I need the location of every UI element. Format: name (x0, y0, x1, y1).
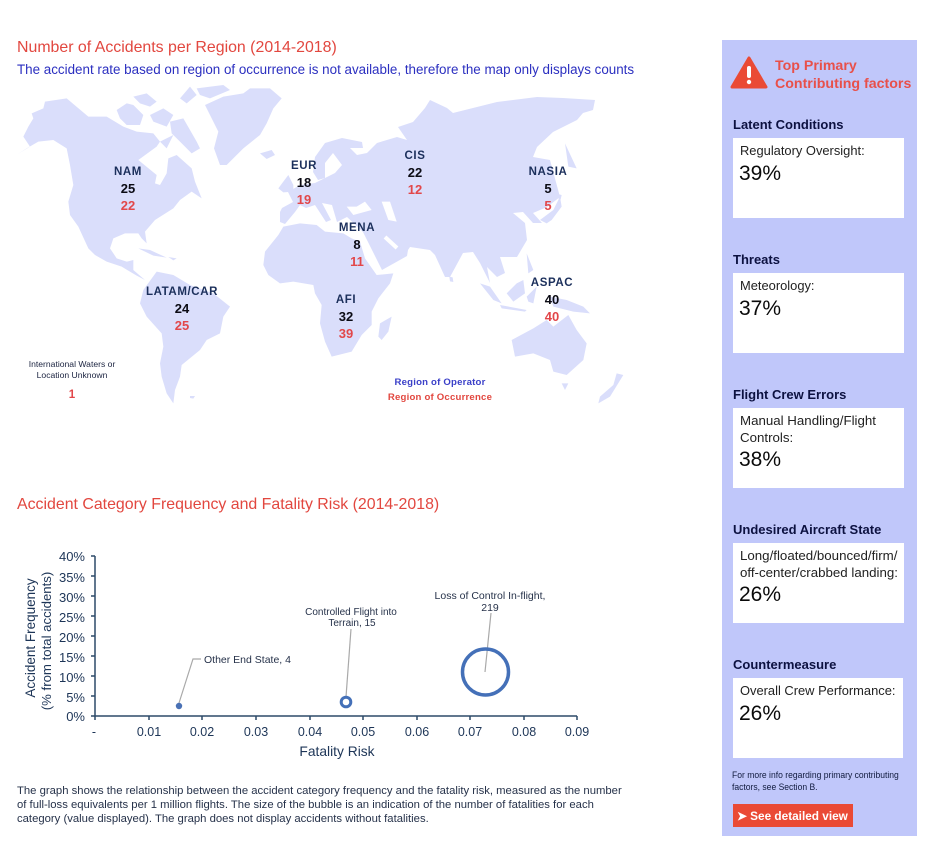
bubble label: loss of control: Loss of Control In-flight, (435, 590, 545, 602)
region: NAM: 25 (121, 181, 135, 196)
card: regulatory oversight (733, 138, 904, 218)
region: EUR (291, 160, 317, 206)
region: ASPAC: 40 (545, 308, 559, 324)
bubble chart (23, 549, 589, 759)
bubble chart: - (92, 725, 96, 739)
bubble chart: 15% (59, 650, 85, 665)
region: ASPAC: ASPAC (531, 277, 573, 289)
bubble chart: 0.08 (512, 725, 536, 739)
card: meteorology: Meteorology: (740, 278, 815, 293)
bubble chart: 0.02 (190, 725, 214, 739)
region: CIS: CIS (404, 150, 425, 162)
chart explanation: The graph shows the relationship between the accident category frequency and the fatality risk, measured as the number (17, 785, 622, 797)
heading: countermeasure: Countermeasure (733, 657, 836, 672)
region: MENA: MENA (339, 222, 375, 234)
button: see detailed view: ➤ See detailed view (737, 809, 848, 823)
button: see detailed view (733, 804, 853, 827)
world map (22, 85, 624, 404)
region: ASPAC (531, 277, 573, 324)
bubble chart: 0.01 (137, 725, 161, 739)
heading: threats: Threats (733, 252, 780, 267)
region: NASIA: 5 (544, 181, 552, 196)
region: MENA: 11 (350, 254, 364, 268)
x axis title: Fatality Risk (299, 744, 375, 759)
region: NASIA (529, 166, 567, 212)
panel heading: Top Primary (775, 58, 857, 74)
region: EUR: EUR (291, 160, 317, 172)
region: EUR: 18 (297, 175, 311, 190)
region: MENA: 8 (353, 237, 361, 252)
chart explanation: of full-loss equivalents per 1 million flights. The size of the bubble is an indication of the number of fatalities for each (17, 799, 594, 811)
footnote (732, 770, 899, 792)
bubble chart: 0.03 (244, 725, 268, 739)
region: MENA (339, 222, 375, 268)
bubble chart: 20% (59, 630, 85, 645)
panel heading: Contributing factors (775, 76, 911, 92)
panel heading (775, 58, 911, 92)
bubble: loss of control in-flight (462, 649, 508, 695)
region: LATAM/CAR (146, 286, 218, 332)
bubble chart: 0.04 (298, 725, 322, 739)
region: CIS (404, 150, 425, 196)
region: AFI (336, 294, 356, 340)
legend: region of operator and occurrence: Region of Occurrence (388, 392, 492, 403)
region: AFI: AFI (336, 294, 356, 306)
card: manual handling: 38% (739, 448, 781, 471)
card: meteorology: 37% (739, 297, 781, 320)
bubble chart: 0.06 (405, 725, 429, 739)
card: overall crew performance: Overall Crew Performance: (740, 683, 895, 698)
card: overall crew performance (733, 678, 903, 758)
region: NAM: NAM (114, 166, 142, 178)
legend: region of operator and occurrence: Region of Operator (394, 377, 486, 388)
region: CIS: 12 (408, 182, 422, 196)
title: accident category chart: Accident Category Frequency and Fatality Risk (2014-2018) (17, 496, 439, 513)
icon: warning triangle (730, 56, 768, 88)
bubble chart: 40% (59, 549, 85, 564)
card: manual handling (733, 408, 904, 488)
bubble label: controlled flight into terrain: Terrain, 15 (328, 618, 376, 629)
bubble chart: 25% (59, 610, 85, 625)
card: landing: off-center/crabbed landing: (740, 565, 898, 580)
bubble label: loss of control: 219 (481, 602, 499, 614)
y axis title: Accident Frequency (23, 578, 38, 698)
footnote: For more info regarding primary contributing (732, 770, 899, 780)
heading: latent conditions: Latent Conditions (733, 117, 844, 132)
bubble label: controlled flight into terrain: Controlled Flight into (305, 607, 397, 618)
region: NASIA: 5 (544, 198, 552, 212)
region: AFI: 39 (339, 326, 353, 340)
subtitle: map note: The accident rate based on region of occurrence is not available, therefore the map only displays counts (17, 62, 634, 77)
bubble chart: 0.05 (351, 725, 375, 739)
bubble chart: 5% (66, 690, 85, 705)
bubble chart: 0.07 (458, 725, 482, 739)
bubble chart: (% from total accidents) (39, 572, 54, 710)
card: landing (733, 543, 904, 623)
note: international waters: International Waters or (29, 359, 115, 369)
region: EUR: 19 (297, 192, 311, 206)
region: CIS: 22 (408, 165, 422, 180)
title: accidents per region: Number of Accidents per Region (2014-2018) (17, 39, 337, 56)
bubble chart: 35% (59, 570, 85, 585)
bubble chart: 10% (59, 670, 85, 685)
chart explanation: category (value displayed). The graph does not display accidents without fatalities. (17, 813, 429, 825)
card: landing: Long/floated/bounced/firm/ (740, 548, 897, 563)
note: international waters (29, 359, 116, 401)
region: NAM: 22 (121, 198, 135, 212)
bubble label: other end state: Other End State, 4 (204, 654, 291, 666)
region: LATAM/CAR: LATAM/CAR (146, 286, 218, 298)
card: manual handling: Manual Handling/Flight Controls: (740, 413, 876, 445)
card: overall crew performance: 26% (739, 702, 781, 725)
region: ASPAC: 40 (545, 292, 559, 307)
note: international waters: 1 (69, 389, 75, 401)
card: regulatory oversight: 39% (739, 162, 781, 185)
region: NAM (114, 166, 142, 212)
chart explanation (17, 785, 622, 825)
bubble: other end state (176, 703, 182, 709)
region: NASIA: NASIA (529, 166, 567, 178)
footnote: factors, see Section B. (732, 782, 818, 792)
region: LATAM/CAR: 24 (175, 301, 189, 316)
note: international waters: Location Unknown (37, 370, 107, 380)
region: AFI: 32 (339, 309, 353, 324)
card: landing: 26% (739, 583, 781, 606)
bubble chart: 30% (59, 590, 85, 605)
card: regulatory oversight: Regulatory Oversight: (740, 143, 865, 158)
region: LATAM/CAR: 25 (175, 318, 189, 332)
bubble chart: 0% (66, 709, 85, 724)
legend: region of operator and occurrence (388, 377, 492, 403)
heading: undesired aircraft state: Undesired Aircraft State (733, 522, 881, 537)
bubble: controlled flight into terrain (341, 697, 351, 707)
heading: flight crew errors: Flight Crew Errors (733, 387, 846, 402)
bubble chart: 0.09 (565, 725, 589, 739)
card: meteorology (733, 273, 904, 353)
